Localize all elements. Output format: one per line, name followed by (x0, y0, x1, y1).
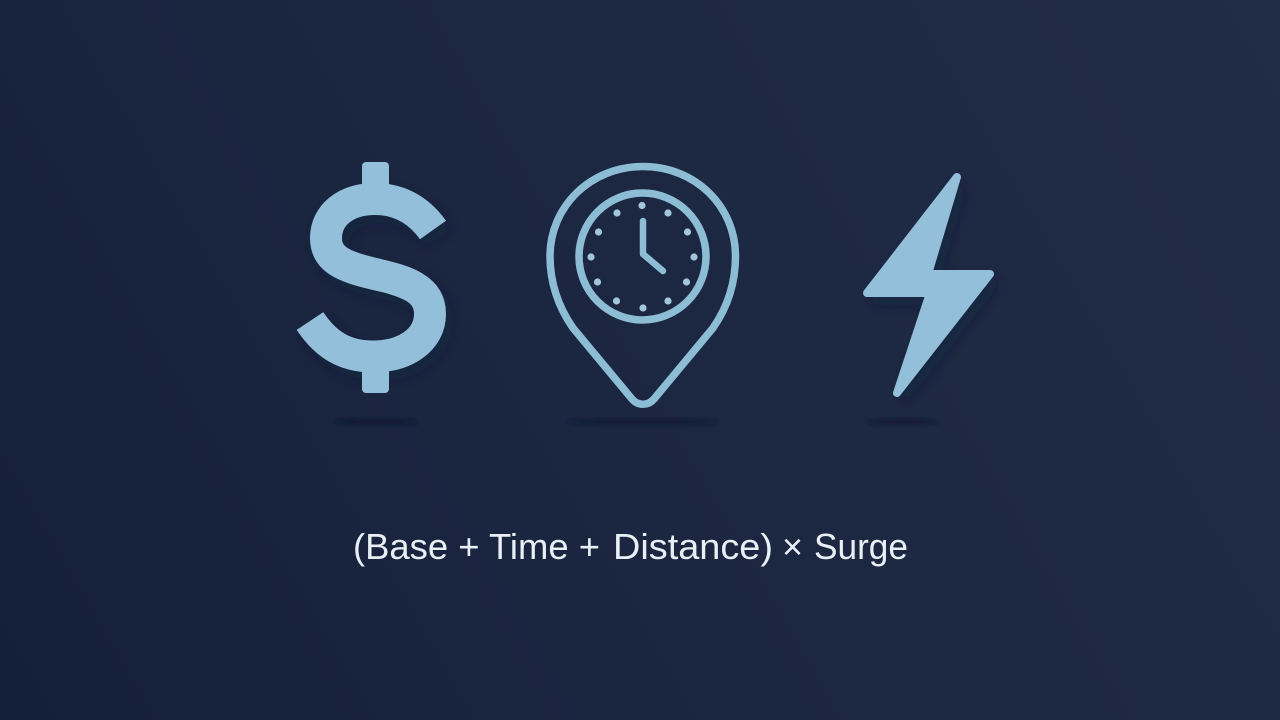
clock hour dots (587, 202, 698, 312)
icon: location pin with clock (550, 166, 736, 424)
formula text: Distance) (613, 526, 773, 567)
formula text: (Base + Time + (353, 526, 600, 567)
clock hands (643, 221, 663, 271)
formula text: Surge (814, 526, 908, 567)
pin outline (550, 166, 736, 404)
icon: dollar sign (310, 162, 439, 424)
formula text: × (782, 526, 803, 567)
clock face (579, 193, 706, 320)
icon: lightning bolt (867, 177, 996, 424)
